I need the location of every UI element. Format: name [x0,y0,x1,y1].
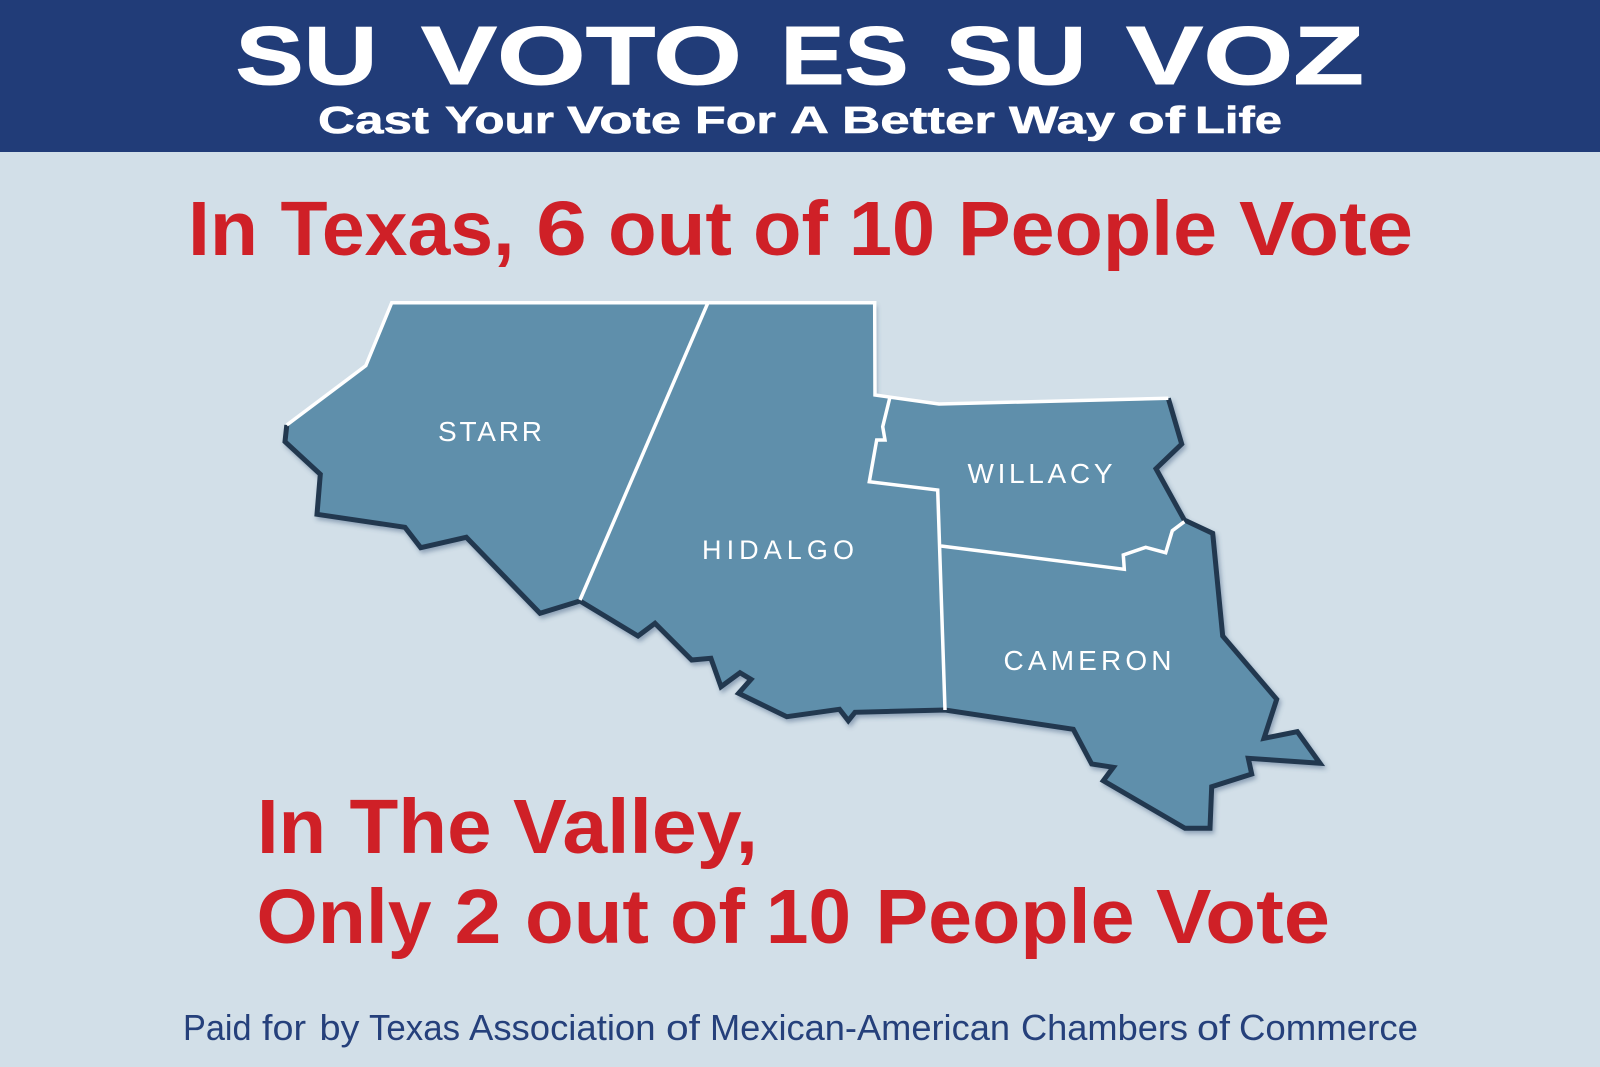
heading: Valley statistic line one: In [257,784,326,870]
footer disclaimer: Chambers [1021,1007,1188,1048]
heading: Valley statistic line two: People [876,874,1134,960]
footer disclaimer: of [1197,1007,1231,1048]
heading: Valley statistic line two: of [670,874,745,960]
footer disclaimer: Texas [369,1007,460,1048]
subtitle: For [695,100,776,142]
subtitle: of [1128,100,1186,142]
heading: Valley statistic line two: 2 [454,874,502,960]
heading: Texas statistic: In [188,186,258,272]
footer disclaimer: by [320,1007,360,1048]
heading: Valley statistic line two [256,874,1330,960]
heading: Valley statistic line two: out [525,874,649,960]
footer disclaimer: Paid [183,1007,252,1048]
subtitle: Vote [567,100,681,142]
footer disclaimer [183,1007,1418,1048]
subtitle: Way [1009,100,1115,142]
heading: Valley statistic line two: 10 [766,874,851,960]
heading: Texas statistic: 6 [536,186,587,272]
label: Cameron county: CAMERON [1004,645,1172,676]
subtitle [318,100,1282,142]
subtitle: Life [1195,100,1282,142]
title: VOTO [421,9,742,102]
footer disclaimer: of [666,1007,701,1048]
header banner [0,0,1600,152]
county borders [287,303,1184,710]
title: VOZ [1126,9,1364,102]
title: SU [236,9,378,102]
label: Hidalgo county: HIDALGO [702,535,854,565]
subtitle: Your [445,100,554,142]
heading: Texas statistic: People [958,186,1217,272]
heading: Texas statistic: Vote [1239,186,1413,272]
heading: Valley statistic line two: Only [256,874,432,960]
footer disclaimer: Commerce [1239,1007,1418,1048]
heading: Valley statistic line two: Vote [1156,874,1330,960]
label: Willacy county: WILLACY [968,458,1113,489]
heading: Texas statistic: of [753,186,828,272]
title: SU [946,9,1086,102]
heading: Valley statistic line one: The [350,784,492,870]
footer disclaimer: Mexican-American [710,1007,1010,1048]
label: Starr county: STARR [438,416,542,447]
footer disclaimer: for [262,1007,306,1048]
map: Rio Grande Valley counties [285,303,1320,828]
subtitle: A [790,100,829,142]
heading: Texas statistic: 10 [849,186,935,272]
title: ES [780,9,908,102]
heading: Valley statistic line one: Valley, [513,784,758,870]
map shape fill with coastline shadow [285,303,1320,828]
heading: Texas statistic: out [608,186,732,272]
subtitle: Better [842,100,995,142]
title [236,9,1364,102]
subtitle: Cast [318,100,429,142]
heading: Valley statistic line one [257,784,758,870]
heading: Texas statistic [188,186,1413,272]
footer disclaimer: Association [469,1007,656,1048]
heading: Texas statistic: Texas, [280,186,514,272]
